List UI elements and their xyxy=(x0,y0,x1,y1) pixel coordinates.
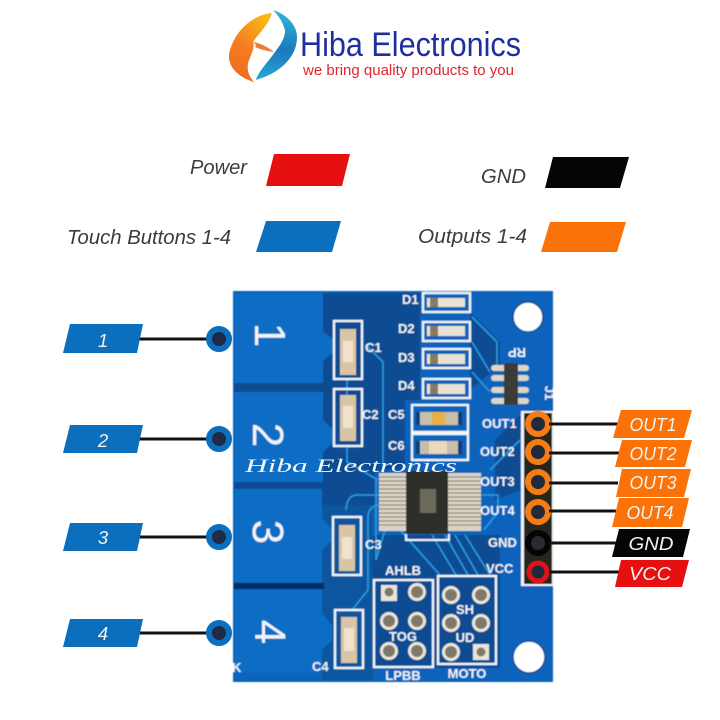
watermark: Hiba Electronics xyxy=(243,456,457,477)
pin OUT2 xyxy=(528,442,548,462)
PCB module xyxy=(232,291,557,683)
legend swatch: black xyxy=(545,157,629,188)
left touch connector 3: 3 xyxy=(98,527,109,548)
MOTO jumper block: SH xyxy=(456,602,474,617)
left touch connector 3 xyxy=(63,523,229,551)
pad numeral 4: 4 xyxy=(245,620,294,644)
tag VCC: VCC xyxy=(629,563,672,584)
resistor pack RP: RP xyxy=(508,345,526,360)
left touch connector 1 xyxy=(63,324,229,353)
resistor pack RP xyxy=(491,345,557,405)
tag OUT1: OUT1 xyxy=(630,414,676,435)
pad numeral 3: 3 xyxy=(243,520,292,544)
logo wordmark: Hiba Electronics xyxy=(300,26,521,64)
pin OUT4 xyxy=(528,502,548,522)
pad gap xyxy=(234,583,324,589)
resistor pack RP: J1 xyxy=(542,386,557,400)
legend swatch: red xyxy=(266,154,350,186)
pin silk labels: OUT3 xyxy=(480,474,515,489)
touch pad 4 xyxy=(234,590,332,673)
tag GND: GND xyxy=(628,533,674,554)
legend swatch: blue xyxy=(256,221,341,252)
header pins xyxy=(528,414,548,581)
capacitor C4: C4 xyxy=(312,659,329,674)
pad numeral 1: 1 xyxy=(245,323,294,347)
legend xyxy=(67,154,629,252)
traces xyxy=(346,317,520,610)
left touch connector 4: 4 xyxy=(98,623,108,644)
MOTO jumper block: UD xyxy=(456,630,474,645)
tag OUT1 xyxy=(613,410,692,438)
pin silk labels xyxy=(480,416,517,576)
capacitor C1 xyxy=(334,321,382,379)
pad gap 2-3 xyxy=(234,482,324,489)
legend swatch: orange xyxy=(541,222,626,252)
tag OUT3: OUT3 xyxy=(630,472,677,493)
left touch connector 1: 1 xyxy=(98,330,108,351)
tag VCC xyxy=(615,560,689,587)
board corner mark: K xyxy=(232,660,242,675)
pad numeral 2: 2 xyxy=(243,423,292,447)
MOTO jumper block: MOTO xyxy=(448,666,486,681)
capacitors C5 and C6: C5 xyxy=(388,407,405,422)
AHLB jumper block: LPBB xyxy=(385,668,421,683)
right pin leads xyxy=(549,424,620,572)
legend label: Outputs: Outputs 1-4 xyxy=(418,226,527,248)
left touch connector 2: 2 xyxy=(97,430,109,451)
touch pad 1 xyxy=(234,293,334,383)
capacitor C3 xyxy=(333,517,382,575)
tag OUT3 xyxy=(616,469,691,497)
pin silk labels: VCC xyxy=(486,561,514,576)
tag OUT4: OUT4 xyxy=(626,502,674,523)
capacitor C4 xyxy=(312,610,363,674)
MOTO jumper block xyxy=(438,576,496,681)
left touch connector 2 xyxy=(63,425,229,453)
capacitor C2: C2 xyxy=(362,407,379,422)
legend label: Power: Power xyxy=(190,157,248,179)
logo: Hiba Electronics xyxy=(229,10,521,82)
LED D2: D2 xyxy=(398,321,415,336)
pin OUT3 xyxy=(528,472,548,492)
capacitors C5 and C6: C6 xyxy=(388,438,405,453)
header J1 xyxy=(521,411,554,586)
pad gap 1-2 xyxy=(234,383,324,392)
icon: orange swirl xyxy=(229,13,272,82)
tag OUT2: OUT2 xyxy=(630,443,677,464)
left touch connector 4 xyxy=(63,619,229,647)
capacitor C2 xyxy=(334,389,379,446)
AHLB jumper block xyxy=(374,563,433,683)
tag OUT4 xyxy=(612,498,689,527)
LED D3: D3 xyxy=(398,350,415,365)
icon: blue swirl xyxy=(256,10,297,80)
LEDs D1 to D4 xyxy=(398,292,470,398)
IC chip with legs xyxy=(379,471,481,540)
dark copper zones xyxy=(322,293,420,505)
pin VCC xyxy=(529,563,547,581)
mounting hole top xyxy=(513,302,543,332)
tag OUT2 xyxy=(615,440,692,467)
legend label: GND: GND xyxy=(481,166,526,188)
icon: centre swoosh xyxy=(253,42,274,52)
tag GND xyxy=(612,529,690,557)
capacitors C5 and C6 xyxy=(388,405,468,460)
AHLB jumper block: AHLB xyxy=(385,563,421,578)
capacitor C1: C1 xyxy=(365,340,382,355)
pin silk labels: OUT1 xyxy=(482,416,517,431)
board base xyxy=(233,291,553,682)
pin silk labels: GND xyxy=(488,535,517,550)
AHLB jumper block: TOG xyxy=(389,629,417,644)
pin GND xyxy=(528,533,548,553)
pin silk labels: OUT2 xyxy=(480,444,515,459)
LED D1: D1 xyxy=(402,292,419,307)
LED D4: D4 xyxy=(398,378,415,393)
legend label: Touch Buttons: Touch Buttons 1-4 xyxy=(67,227,231,249)
pin silk labels: OUT4 xyxy=(480,503,515,518)
touch pad 3 xyxy=(234,489,332,582)
pin OUT1 xyxy=(528,414,548,434)
touch pad 2 xyxy=(234,392,334,482)
mounting hole bottom xyxy=(513,641,545,673)
capacitor C3: C3 xyxy=(365,537,382,552)
logo tagline: we bring quality products to you xyxy=(302,63,514,79)
